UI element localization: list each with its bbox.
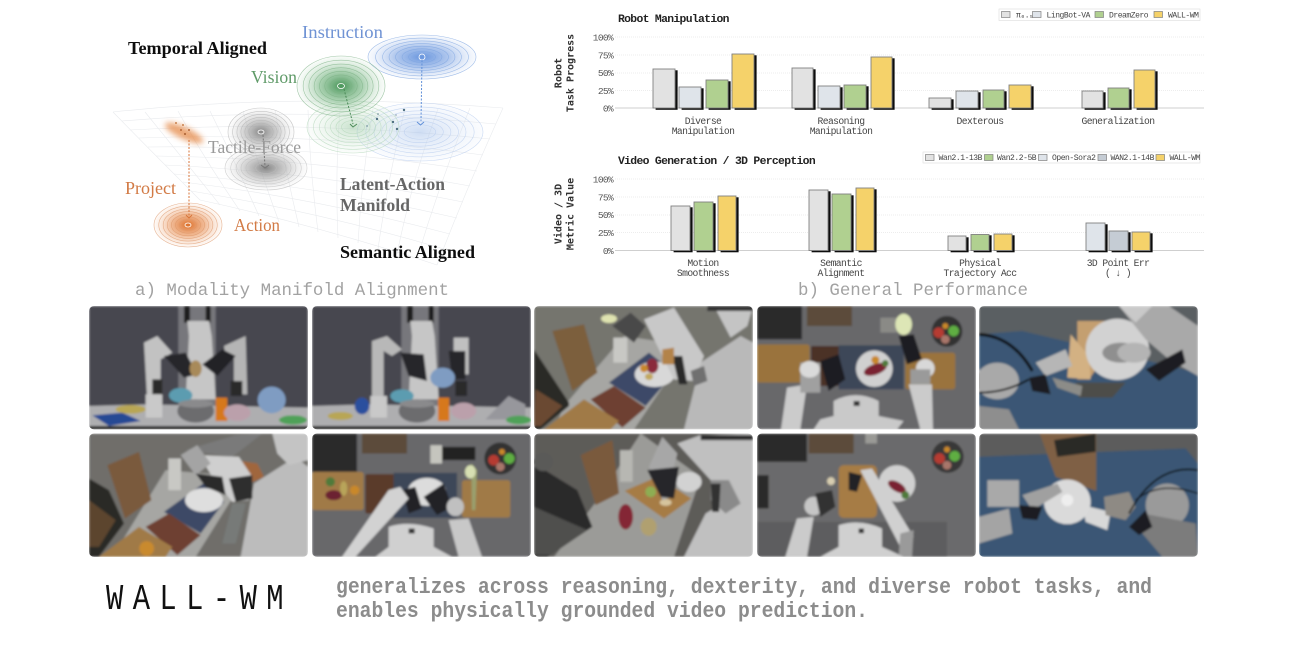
manifold grid surface [113, 101, 503, 265]
legend: WALL-WM [1170, 154, 1201, 163]
projected grey distribution [225, 146, 307, 190]
arrow: vision projection [344, 89, 357, 127]
axis and grid [593, 174, 1204, 257]
legend: WALL-WM [1168, 12, 1199, 20]
distribution: tactile-force [228, 108, 294, 156]
arrow: tactile projection [261, 135, 269, 168]
category labels: Dexterous [957, 116, 1004, 127]
projected blue distribution [357, 103, 483, 161]
category labels: Alignment [818, 268, 864, 279]
bars: motion smoothness [671, 196, 736, 250]
label: latent-action manifold [340, 174, 445, 215]
category labels [672, 116, 1154, 137]
caption a: a) Modality Manifold Alignment [135, 281, 449, 301]
label: latent-action manifold: Latent-Action [340, 174, 445, 194]
legend: Open-Sora2 [1052, 154, 1096, 163]
description [336, 575, 1152, 624]
axis and grid: 50% [598, 68, 614, 79]
label: latent-action manifold: Manifold [340, 195, 410, 215]
axis label: Metric Value [564, 178, 576, 250]
category labels: Generalization [1082, 116, 1154, 127]
axis and grid [593, 32, 1204, 114]
category labels: Reasoning [818, 116, 864, 127]
photo: angled counter, basket with fruit [533, 434, 753, 557]
legend: WAN2.1-14B [1110, 154, 1155, 163]
axis and grid: 0% [603, 246, 614, 257]
category labels: Smoothness [677, 268, 730, 279]
axis and grid: 25% [598, 228, 614, 239]
category labels [677, 258, 1149, 279]
axis label: Video / 3D [553, 184, 565, 244]
panel: modality manifold alignment [113, 22, 503, 265]
projected green distribution [307, 101, 399, 153]
axis label [554, 34, 576, 112]
bars shadows [674, 189, 1153, 252]
axis and grid: 25% [598, 86, 614, 97]
arrow: action projection [186, 140, 192, 218]
category labels: Manipulation [810, 126, 872, 137]
category labels: Diverse [685, 116, 722, 127]
photo: overhead view, arms on plate [312, 434, 531, 557]
chart title: Video Generation / 3D Perception [618, 156, 816, 168]
legend [999, 9, 1200, 20]
label: temporal aligned: Temporal Aligned [128, 38, 267, 58]
photo: overhead view, basket and arm [757, 434, 976, 557]
category labels: ( ↓ ) [1105, 268, 1131, 279]
bars: diverse manipulation [653, 54, 754, 108]
axis and grid: 75% [598, 192, 614, 204]
bars: generalization [1082, 70, 1155, 108]
legend [923, 152, 1201, 163]
axis label: Robot [554, 58, 565, 88]
description: generalizes across reasoning, dexterity, and diverse robot tasks, and [336, 575, 1152, 600]
bars: reasoning manipulation [792, 57, 892, 108]
category labels: 3D Point Err [1087, 258, 1149, 269]
bars: semantic alignment [809, 188, 874, 250]
distribution: action [154, 203, 222, 247]
photo: angled counter, gripper over plate [89, 434, 308, 557]
projected orange smudge [162, 119, 206, 147]
photo: front view robot, arms together [89, 306, 308, 429]
category labels: Manipulation [672, 126, 734, 137]
bars: dexterous [929, 85, 1031, 108]
legend: LingBot-VA [1046, 12, 1091, 20]
photo: fan and cardboard box, blue mat [976, 306, 1198, 429]
caption b: b) General Performance [798, 281, 1028, 301]
category labels: Trajectory Acc [944, 268, 1017, 279]
label: semantic aligned: Semantic Aligned [340, 242, 475, 262]
axis and grid: 100% [593, 32, 614, 44]
axis and grid: 100% [593, 174, 614, 186]
photo: fan held by two arms, box behind [979, 434, 1198, 557]
chart: robot manipulation [554, 9, 1204, 137]
photo: angled counter, plate with food [534, 306, 753, 429]
distribution: instruction [368, 35, 476, 79]
scatter points [366, 109, 405, 130]
chart title: Robot Manipulation [618, 14, 730, 26]
bars: 3D point error [1086, 223, 1150, 250]
category labels: Semantic [820, 258, 863, 269]
axis and grid: 0% [603, 104, 614, 114]
legend: Wan2.2-5B [997, 154, 1037, 163]
bars shadows [656, 55, 1158, 110]
category labels: Physical [959, 258, 1002, 269]
legend: π₀.₅ [1016, 12, 1033, 20]
brand name: WALL-WM [106, 579, 284, 620]
arrow: instruction projection [417, 60, 424, 125]
chart: video generation and 3D perception [553, 152, 1204, 279]
description: enables physically grounded video prediction. [336, 599, 868, 624]
axis and grid: 50% [598, 210, 614, 221]
label: action: Action [234, 215, 280, 235]
bars: physical trajectory accuracy [948, 234, 1012, 250]
label: vision: Vision [251, 67, 297, 87]
axis label [553, 178, 576, 250]
photo: front view robot, lid lifted [312, 306, 531, 429]
axis and grid: 75% [598, 50, 614, 62]
legend: Wan2.1-13B [938, 154, 983, 163]
label: instruction: Instruction [302, 22, 383, 42]
photo: overhead view, arms beside plate [757, 306, 976, 429]
legend: DreamZero [1109, 12, 1149, 20]
label: tactile-force: Tactile-Force [208, 137, 301, 157]
category labels: Motion [687, 258, 719, 269]
label: project: Project [125, 178, 176, 198]
axis label: Task Progress [566, 34, 576, 112]
distribution: vision [297, 56, 385, 116]
